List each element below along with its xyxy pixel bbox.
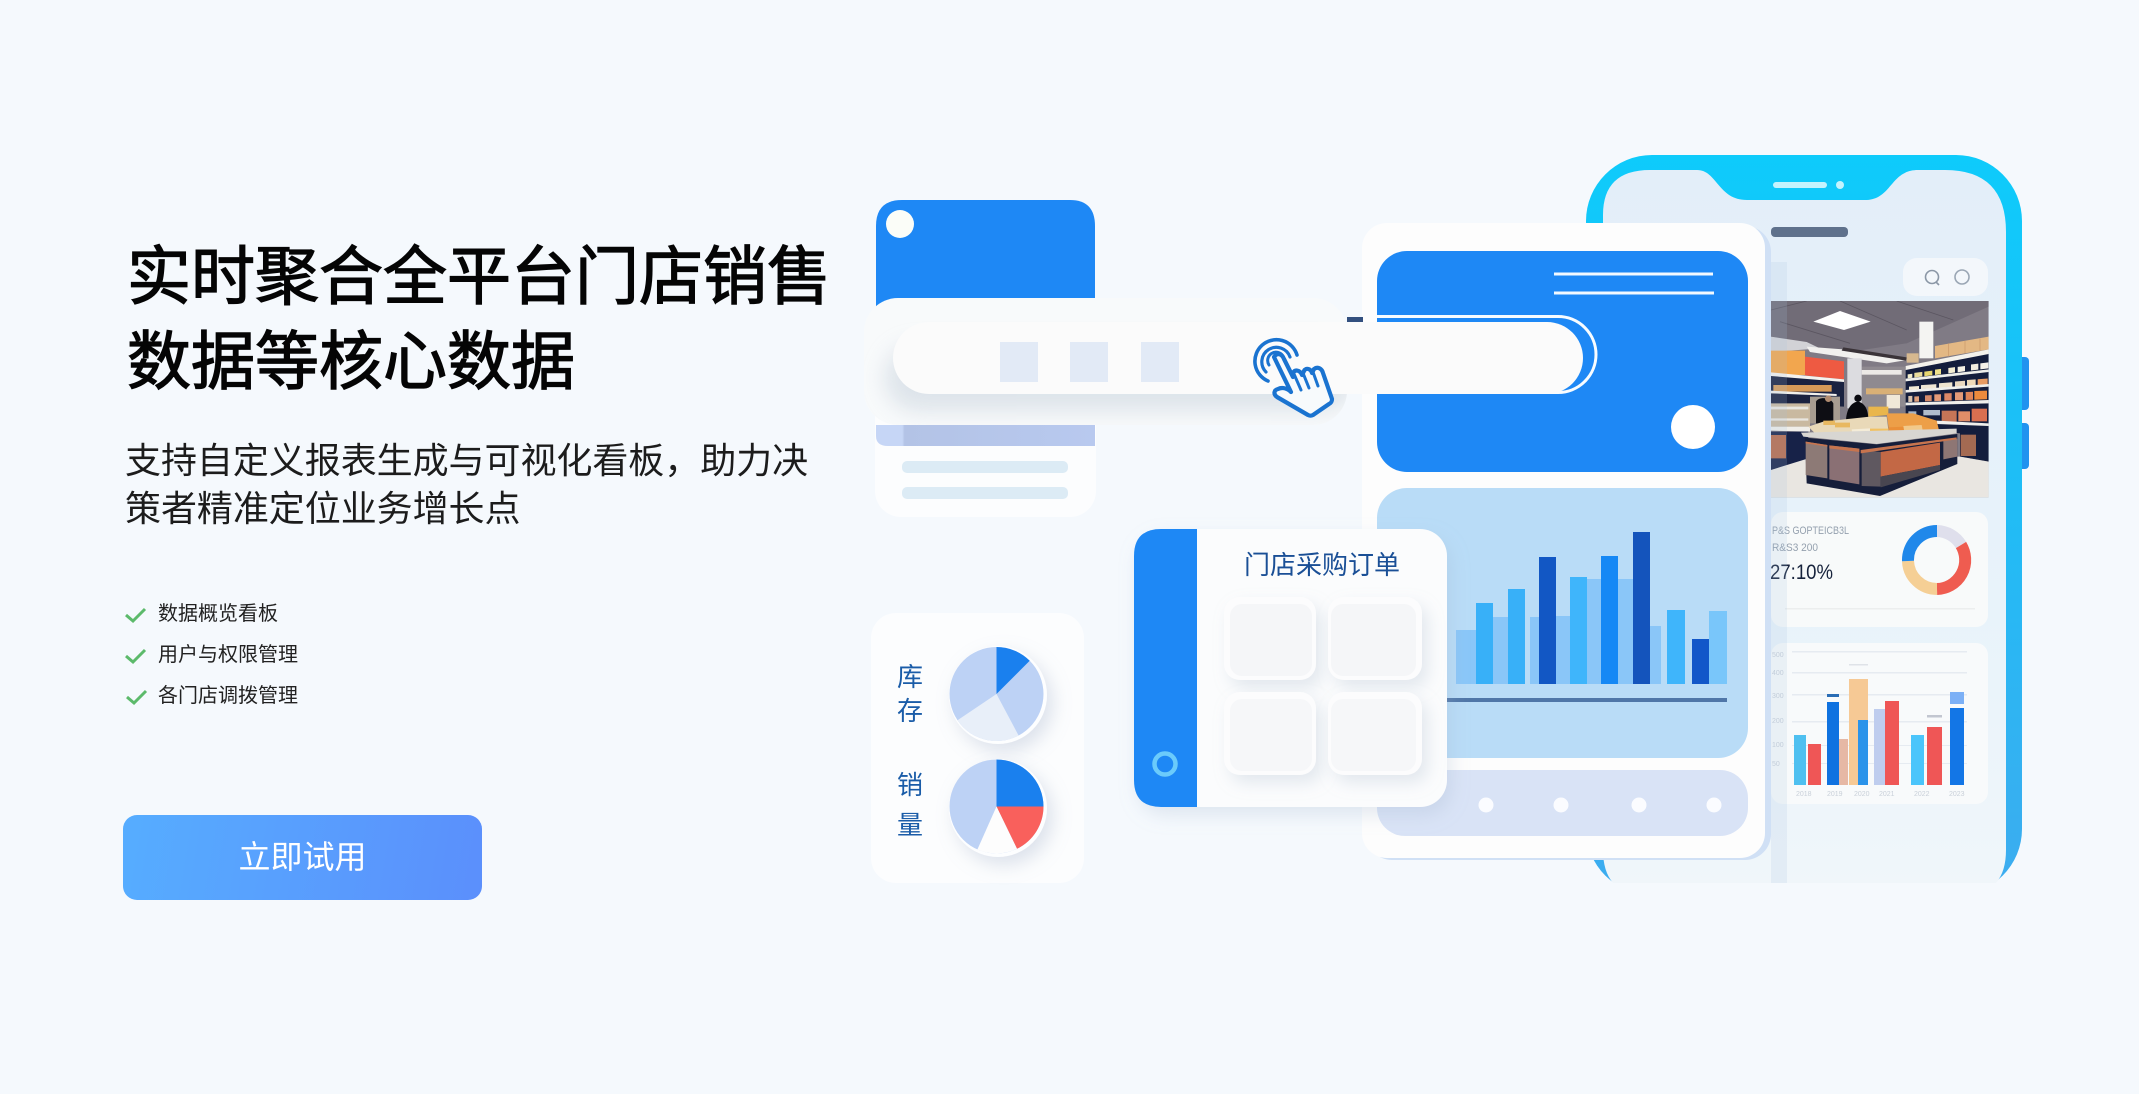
store right shelves	[1906, 349, 1989, 462]
axis labels: 200	[1772, 718, 1784, 725]
pie: inventory	[949, 646, 1047, 744]
icon: check 1	[126, 609, 145, 621]
label: 销量: 量	[897, 810, 923, 840]
donut chart	[1908, 531, 1965, 589]
axis labels: 50	[1772, 761, 1780, 768]
status bar	[1771, 227, 1848, 237]
store island goods	[1808, 406, 1939, 432]
subtitle text: 支持自定义报表生成与可视化看板，助力决	[125, 440, 808, 481]
header lines	[1554, 272, 1714, 294]
title: 数据等核心数据	[127, 326, 575, 398]
feature item: 用户与权限管理: 用户与权限管理	[158, 644, 298, 666]
left blue card	[875, 200, 1096, 517]
search bar	[864, 298, 1583, 425]
bar chart card	[1771, 643, 1988, 804]
axis labels: 300	[1772, 693, 1784, 700]
phone speaker	[1773, 181, 1844, 189]
axis labels: 2018	[1796, 791, 1812, 798]
search pill	[1903, 258, 1988, 296]
icon: tapping hand	[1255, 340, 1332, 416]
chart panel	[1377, 488, 1748, 758]
pill squares	[1000, 342, 1179, 382]
axis labels: 400	[1772, 670, 1784, 677]
store photo illustration	[1771, 301, 1989, 497]
phone side buttons	[2016, 357, 2029, 469]
icon: check 2	[126, 650, 145, 662]
blue side strip	[1134, 529, 1197, 807]
axis labels: 500	[1772, 652, 1784, 659]
blue header panel	[1377, 251, 1748, 472]
title: 实时聚合全平台门店销售	[127, 241, 831, 313]
label: 销量	[897, 770, 923, 840]
label: 销量: 销	[897, 770, 923, 800]
placeholder lines	[902, 461, 1068, 499]
order title: 门店采购订单	[1244, 550, 1400, 580]
label: 库存: 存	[897, 696, 923, 726]
stats card with donut: R&S3 200	[1772, 542, 1818, 554]
axis labels: 2023	[1949, 791, 1965, 798]
percentage value: 27:10%	[1770, 561, 1833, 584]
axis labels: 100	[1772, 742, 1784, 749]
inner pill	[893, 322, 1583, 394]
axis labels: 2019	[1827, 791, 1843, 798]
central dashboard card	[1362, 223, 1771, 860]
procurement order card	[1134, 529, 1447, 807]
pie: sales	[949, 759, 1047, 857]
label: 库存: 库	[897, 662, 923, 692]
stats card with donut	[1770, 512, 1988, 627]
header circle	[1671, 405, 1715, 449]
button: 立即试用: 立即试用	[238, 839, 366, 875]
label: 库存	[897, 662, 923, 726]
tiles	[1224, 597, 1422, 775]
bars	[1794, 664, 1964, 785]
icon: check 3	[127, 691, 146, 703]
illustration and check icons	[125, 155, 2029, 883]
bottom panel with dots	[1377, 770, 1748, 836]
subtitle text: 策者精准定位业务增长点	[125, 488, 520, 529]
subtitle text	[125, 440, 808, 529]
translucent side band	[1771, 262, 1787, 883]
feature item: 数据概览看板: 数据概览看板	[158, 603, 278, 625]
axis labels: 2022	[1914, 791, 1930, 798]
axis labels	[1772, 652, 1965, 798]
phone mockup	[1586, 155, 2029, 896]
title	[127, 241, 831, 398]
axis labels: 2020	[1854, 791, 1870, 798]
pie charts card	[871, 613, 1084, 883]
button: 立即试用	[123, 815, 482, 900]
white arc outline	[1377, 316, 1596, 392]
central bar chart	[1430, 532, 1727, 702]
axis labels: 2021	[1879, 791, 1895, 798]
feature item: 各门店调拨管理: 各门店调拨管理	[158, 685, 298, 707]
ring icon	[1154, 754, 1176, 774]
phone frame and screen	[1586, 155, 2022, 896]
blurred stat labels: P&S GOPTEICB3L	[1772, 525, 1849, 537]
